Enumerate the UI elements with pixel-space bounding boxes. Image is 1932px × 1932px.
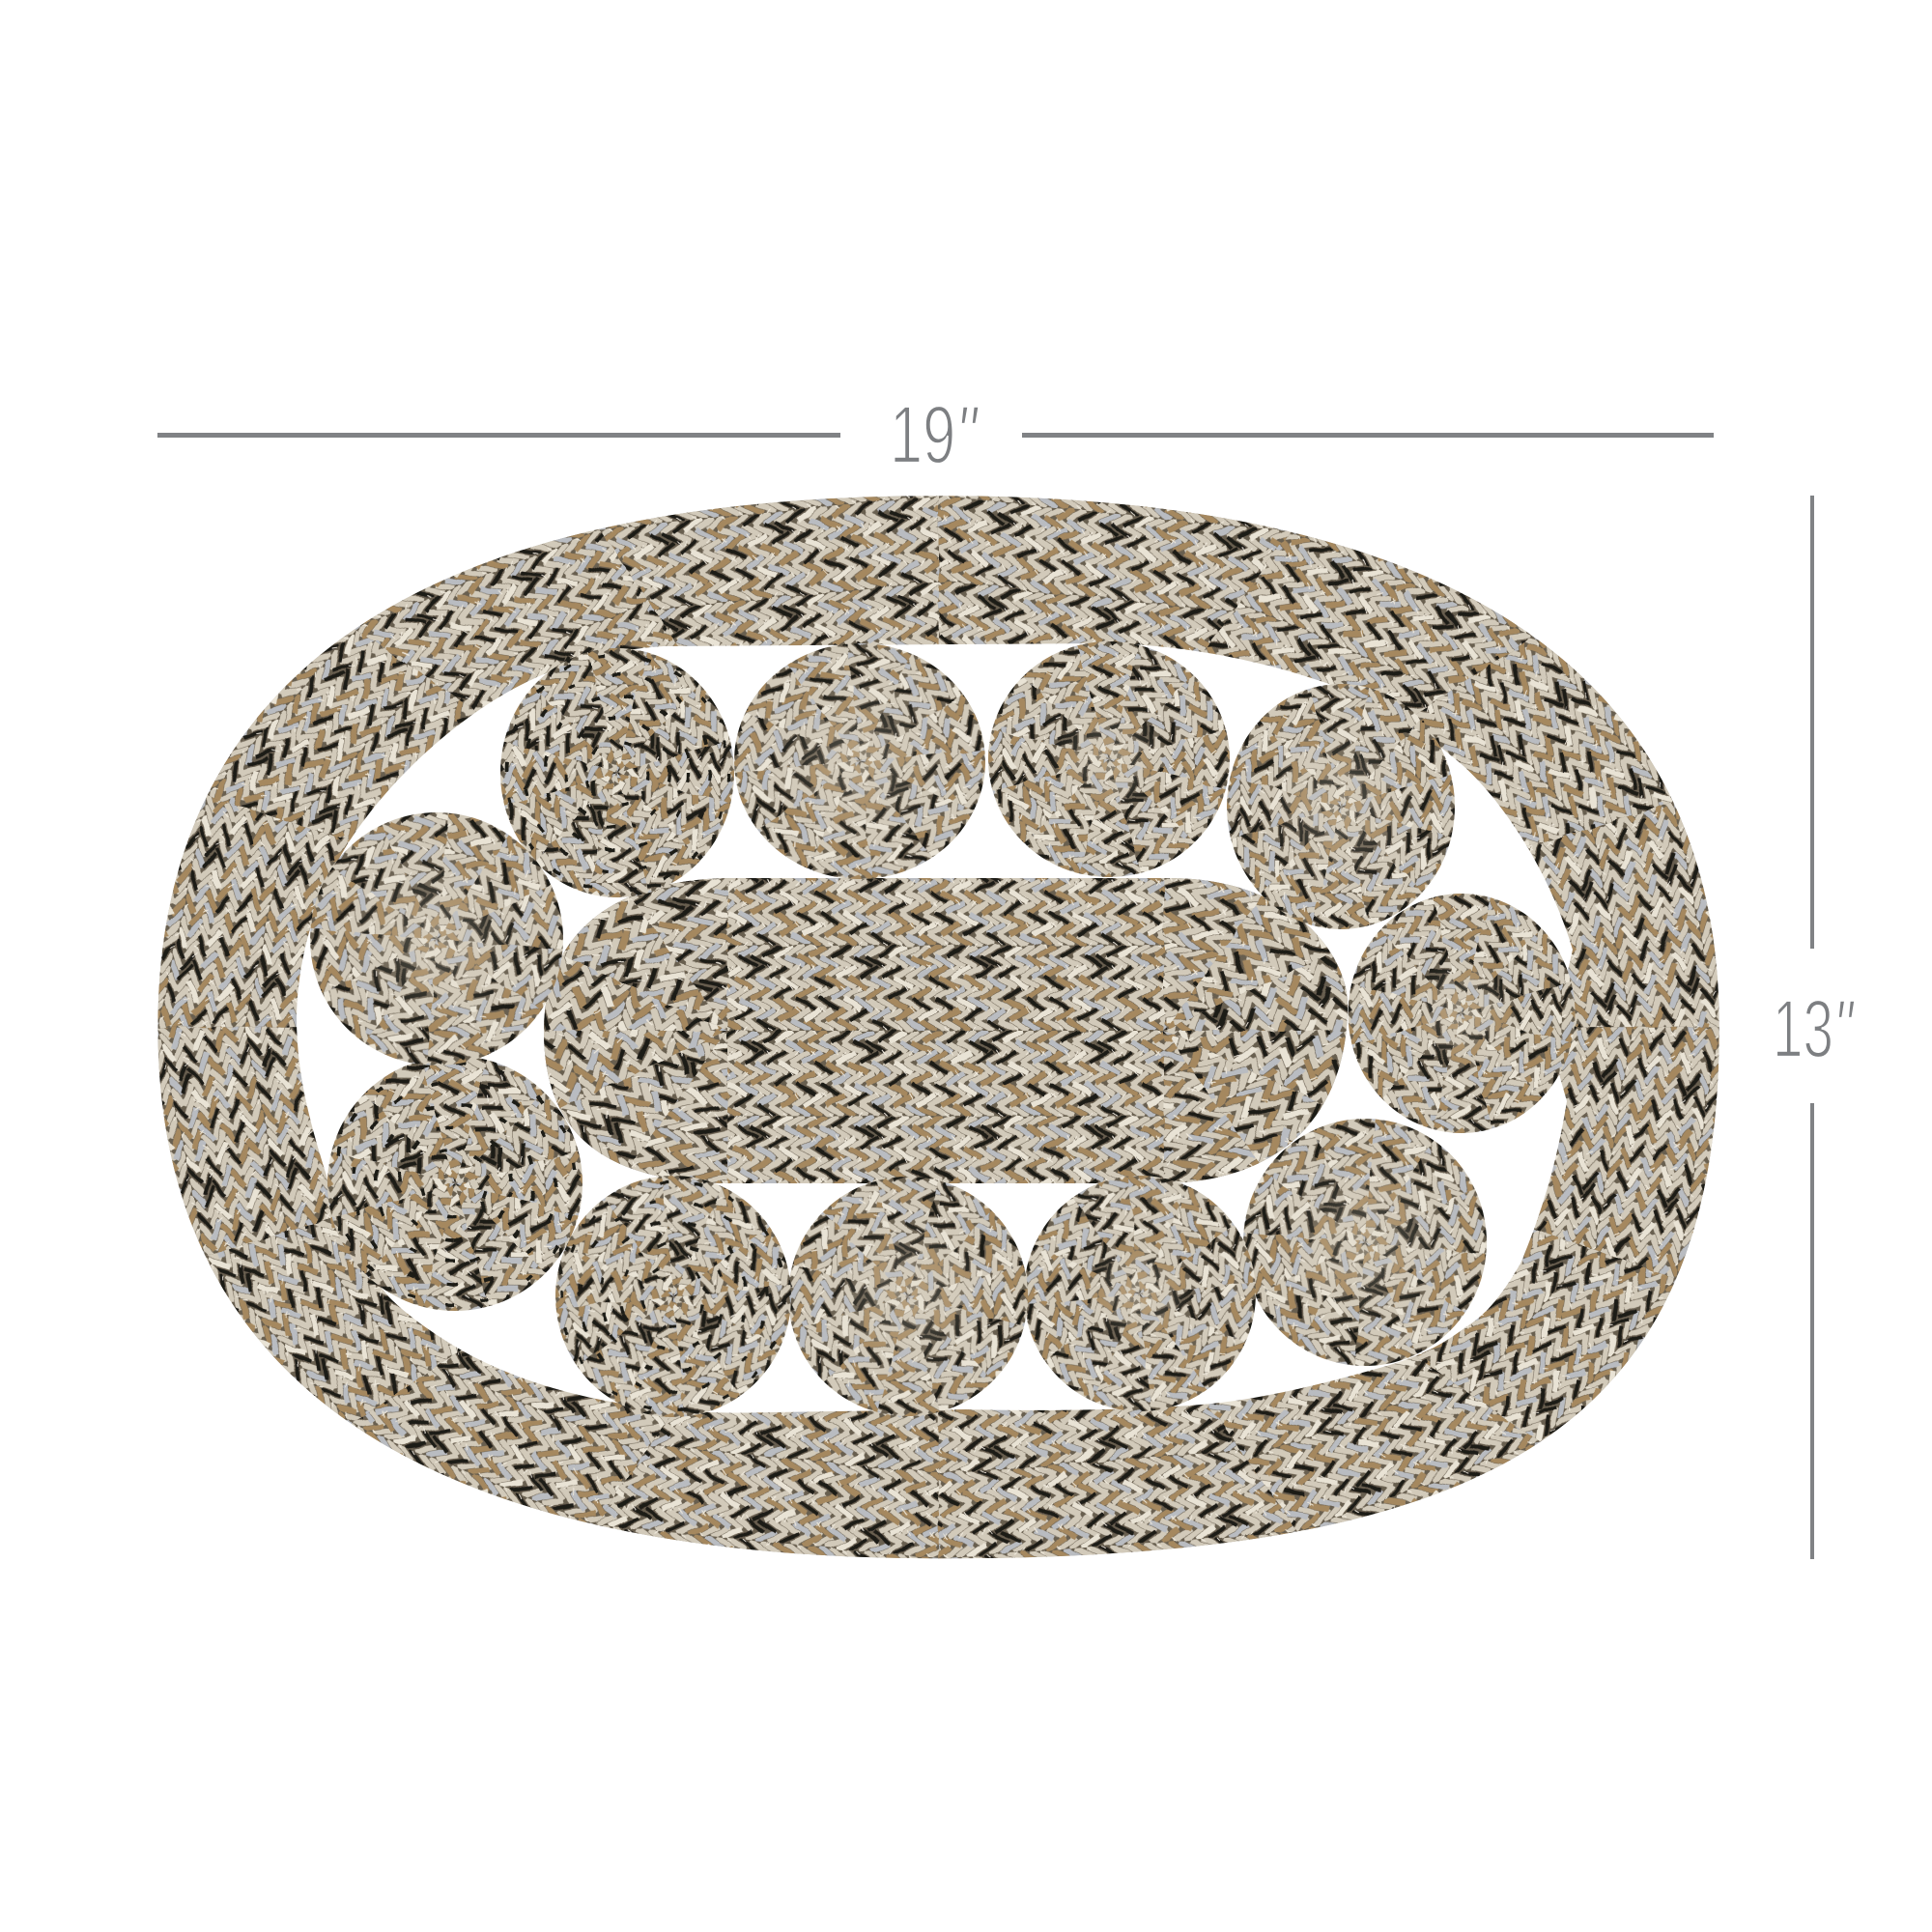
width dimension line [157, 433, 1714, 438]
inner cut-out opening [297, 643, 1573, 1412]
coaster circle: upper left [261, 763, 612, 1115]
coaster circle: bottom row 2 [730, 1119, 1086, 1474]
height label: 13" [1773, 983, 1855, 1074]
coaster circle: bottom row 1 [509, 1128, 838, 1464]
coaster circle: top row 3 [978, 632, 1240, 887]
width label: 19" [890, 389, 979, 480]
rug outer braided band [158, 496, 1719, 1559]
height dimension line [1810, 496, 1814, 1559]
rug: braided oval placemat [158, 496, 1719, 1559]
coaster circle: right [1338, 883, 1585, 1144]
coaster circle: top row 2 [685, 597, 1035, 925]
coaster circle: lower left [317, 1045, 593, 1321]
center oval braid [544, 878, 1348, 1183]
coaster circle: top row 4 [1217, 673, 1464, 940]
coaster circle: bottom row 3 [979, 1129, 1301, 1458]
coaster circle: bottom row 4 [1196, 1070, 1534, 1414]
coaster circle: top row 1 [491, 638, 744, 908]
